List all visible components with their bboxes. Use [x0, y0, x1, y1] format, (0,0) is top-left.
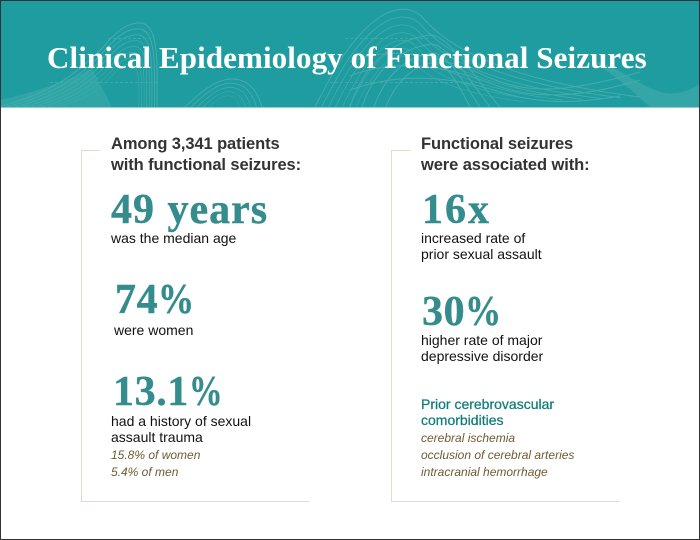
stat: 30%: depressive disorder	[421, 348, 543, 364]
right heading: Functional seizures	[421, 135, 573, 153]
panel bracket	[81, 150, 310, 502]
comorbidity list: cerebral ischemia	[421, 431, 515, 445]
stat: 74%: were women	[114, 322, 193, 338]
stat: 16x: prior sexual assault	[421, 246, 542, 262]
stat: 16x: 16x	[422, 187, 491, 233]
panel bracket	[391, 150, 620, 502]
sex breakdown	[111, 448, 200, 479]
title: Clinical Epidemiology of Functional Seizures	[47, 40, 647, 75]
stat: 49 years: was the median age	[111, 230, 236, 246]
cerebrovascular comorbidities: comorbidities	[421, 412, 503, 428]
cerebrovascular comorbidities	[421, 396, 574, 479]
stat: 13.1%: 13.1	[113, 369, 189, 415]
stat: 30%: %	[465, 289, 502, 335]
stat: 13.1%	[111, 369, 251, 479]
stat: 74%: %	[158, 277, 195, 323]
sex breakdown: 5.4% of men	[111, 465, 178, 479]
stat: 16x: increased rate of	[421, 230, 525, 246]
header banner	[0, 0, 700, 108]
left heading	[111, 135, 301, 174]
stat: 30%: 30	[422, 289, 465, 335]
comorbidity list: intracranial hemorrhage	[421, 465, 548, 479]
stat: 13.1%: had a history of sexual	[111, 413, 251, 429]
left heading: with functional seizures:	[111, 156, 301, 174]
right heading: were associated with:	[421, 156, 589, 174]
stat: 30%: higher rate of major	[421, 332, 542, 348]
stat: 30%	[421, 289, 543, 364]
stat: 13.1%: %	[189, 369, 223, 415]
left heading: Among 3,341 patients	[111, 135, 280, 153]
panel: associations	[391, 150, 620, 502]
stat: 13.1%: assault trauma	[111, 429, 203, 445]
comorbidity list	[421, 431, 574, 479]
stat: 49 years: 49 years	[111, 187, 268, 233]
right heading	[421, 135, 589, 174]
stat: 74%: 74	[115, 277, 158, 323]
panel: patient statistics	[81, 150, 310, 502]
decorative wave pattern	[1, 8, 699, 107]
sex breakdown: 15.8% of women	[111, 448, 200, 462]
stat: 74%	[114, 277, 195, 338]
cerebrovascular comorbidities: Prior cerebrovascular	[421, 396, 554, 412]
comorbidity list: occlusion of cerebral arteries	[421, 448, 574, 462]
stat: 16x	[421, 187, 542, 262]
